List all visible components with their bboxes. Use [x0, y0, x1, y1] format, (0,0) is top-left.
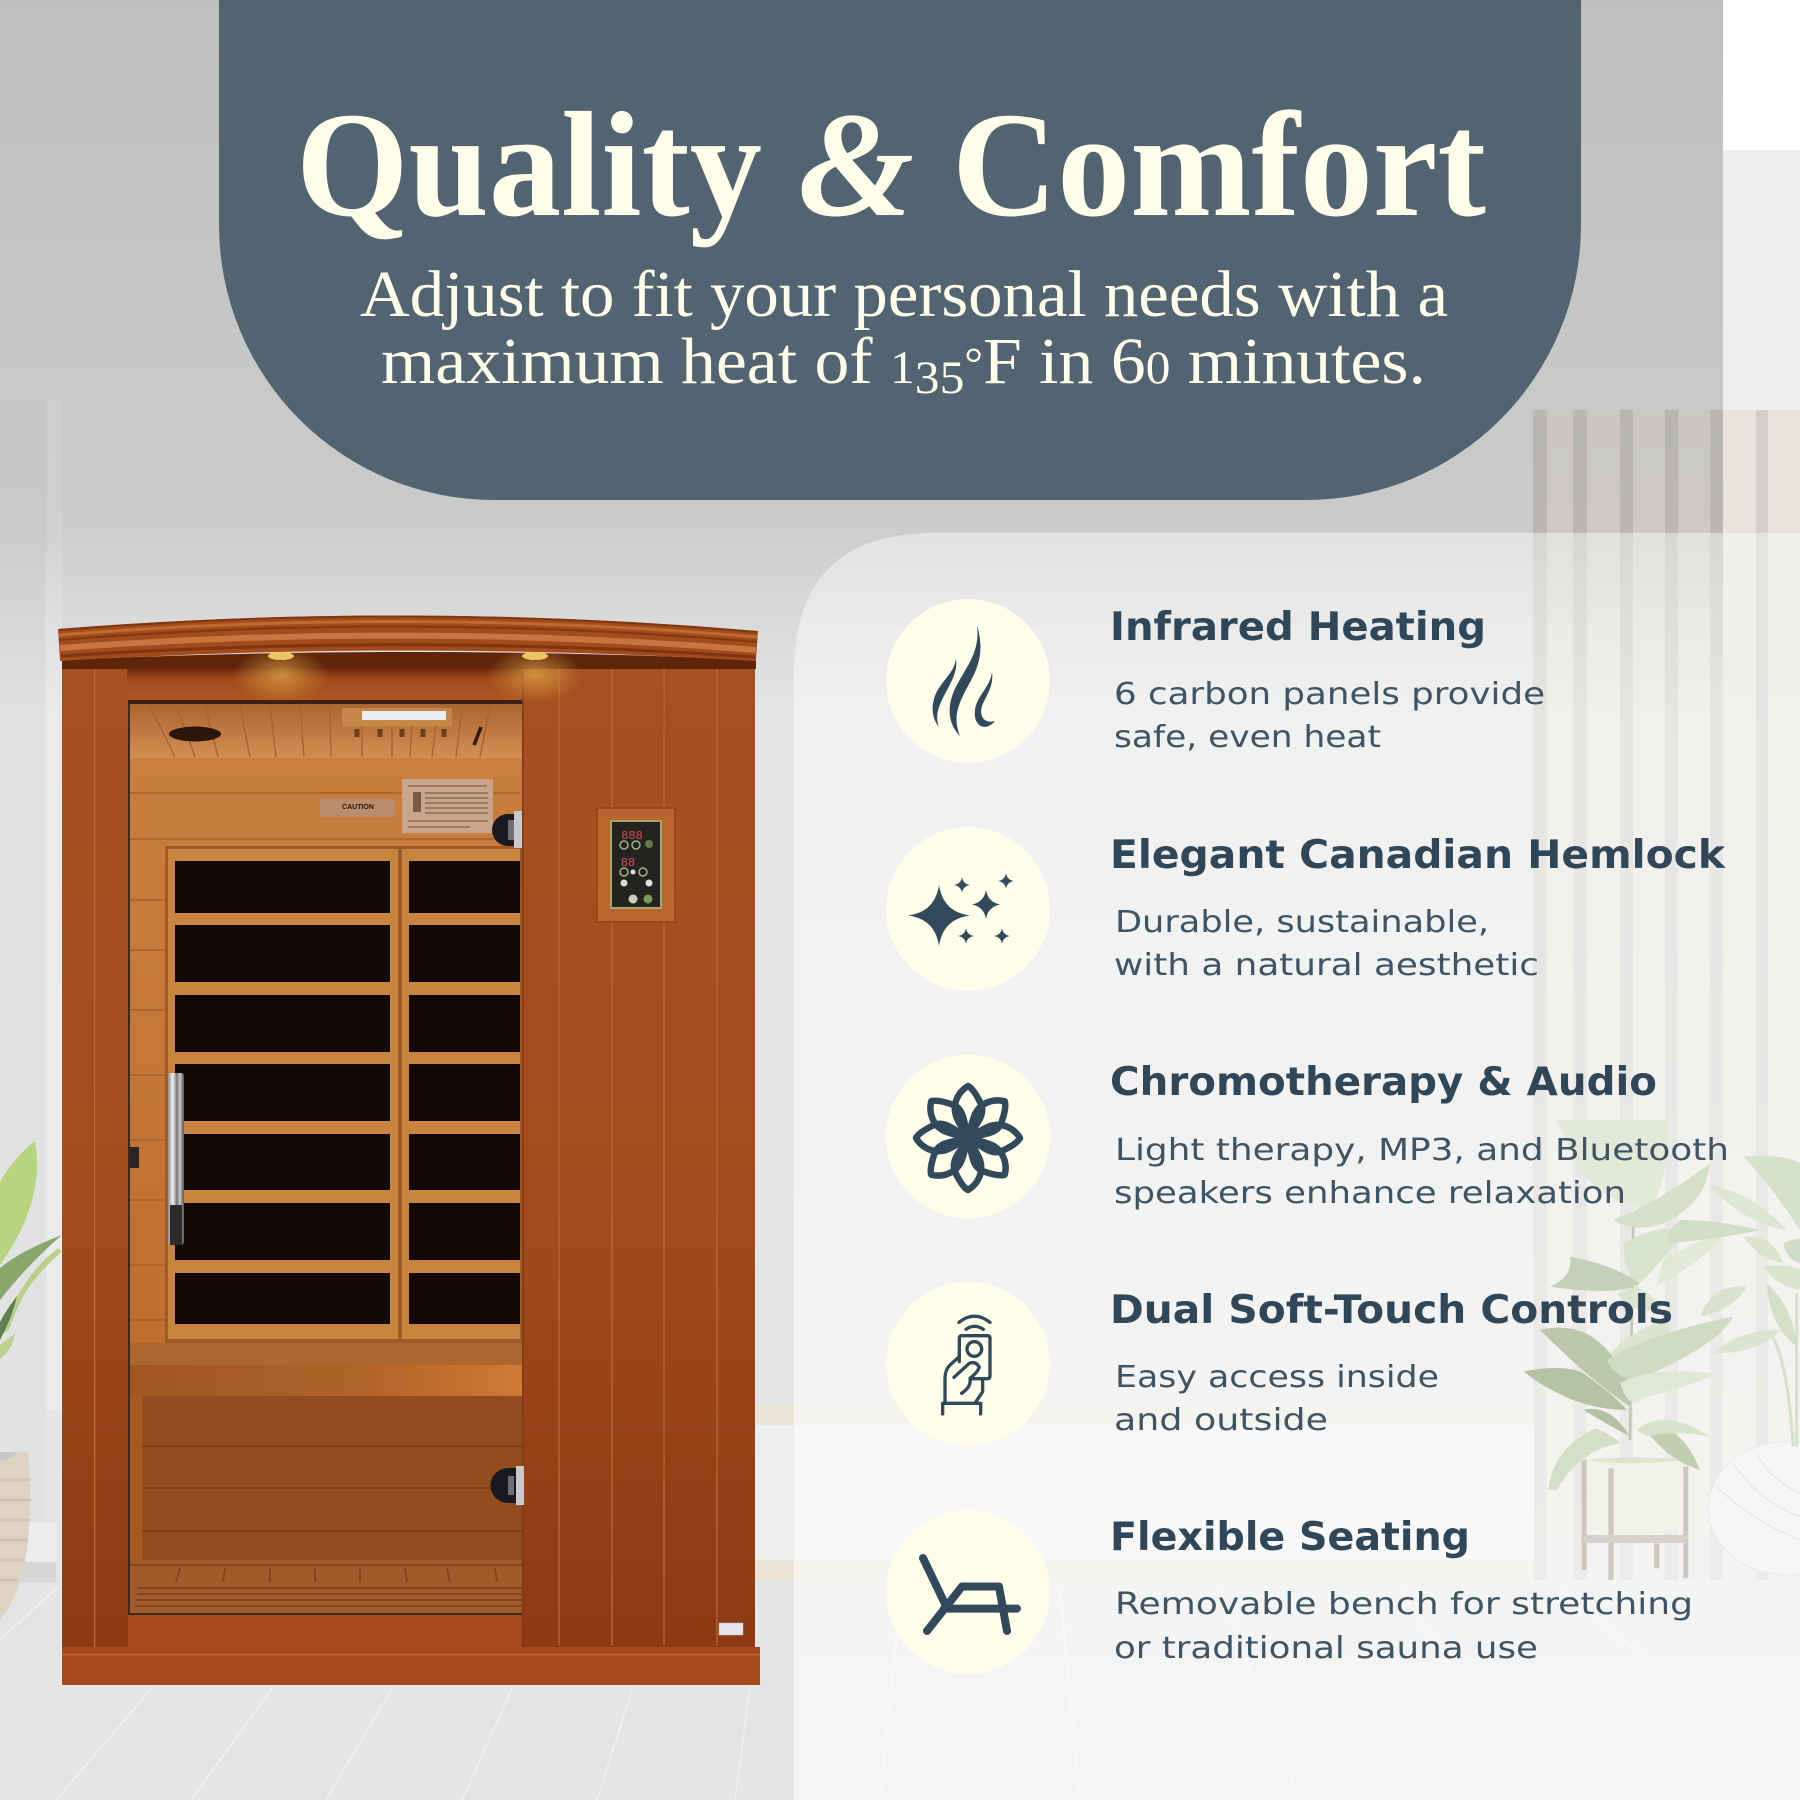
right cabin panel — [522, 668, 755, 1647]
white corner block — [1723, 0, 1800, 150]
description: Light therapy, MP3, and Bluetooth — [1115, 1133, 1729, 1168]
bench — [130, 1343, 522, 1561]
glass edge — [129, 704, 522, 1614]
feature: Dual Soft-Touch Controls — [886, 1282, 1673, 1446]
control panel — [597, 808, 675, 922]
feature: Infrared Heating — [886, 599, 1545, 763]
description: safe, even heat — [1114, 720, 1381, 755]
ceiling lights — [233, 647, 583, 703]
floor slats — [130, 1560, 522, 1614]
heading: Infrared Heating — [1110, 605, 1486, 650]
title: & — [798, 82, 914, 248]
heading: Dual Soft-Touch Controls — [1110, 1288, 1673, 1333]
subtitle: ° — [964, 339, 983, 388]
carbon heater panels — [165, 846, 522, 1343]
description: with a natural aesthetic — [1114, 948, 1539, 983]
description: speakers enhance relaxation — [1114, 1176, 1626, 1211]
feature: Flexible Seating — [886, 1510, 1693, 1674]
description: or traditional sauna use — [1114, 1631, 1538, 1666]
subtitle: F — [983, 325, 1022, 398]
description: Durable, sustainable, — [1115, 905, 1489, 940]
ceiling — [128, 700, 522, 758]
subtitle: 35 — [915, 352, 964, 404]
door hinges — [490, 811, 524, 1505]
fiddle leaves — [1523, 1120, 1760, 1490]
control panel: 88 — [621, 856, 635, 870]
feature: Chromotherapy & Audio — [886, 1054, 1729, 1218]
sauna cabin — [58, 615, 760, 1685]
description — [1114, 1587, 1693, 1666]
door bottom rail — [128, 1614, 526, 1648]
door header rail — [127, 666, 523, 700]
icon: sparkles — [886, 827, 1050, 991]
interior — [128, 700, 522, 1614]
panel: features backdrop — [794, 533, 1800, 1800]
title: Comfort — [952, 82, 1486, 248]
crown moulding — [58, 615, 758, 669]
description: Removable bench for stretching — [1115, 1587, 1693, 1622]
plinth — [62, 1647, 760, 1685]
top dark overlay — [0, 0, 1723, 720]
description — [1114, 905, 1539, 983]
subtitle: Adjust to fit your personal needs with a — [360, 258, 1448, 331]
back wall — [128, 700, 522, 1350]
description — [1114, 1360, 1439, 1438]
icon: heat waves — [886, 599, 1050, 763]
door handle — [168, 1073, 184, 1245]
certification label — [719, 1623, 743, 1635]
heading: Flexible Seating — [1110, 1515, 1470, 1560]
control panel: 888 — [621, 829, 643, 843]
title: Quality — [296, 82, 762, 248]
woven basket — [0, 1452, 31, 1620]
description: Easy access inside — [1115, 1360, 1439, 1395]
plant at left — [0, 1141, 62, 1359]
caution plates — [320, 779, 493, 833]
door latch — [128, 1147, 139, 1168]
caution plates: CAUTION — [342, 804, 374, 811]
title — [296, 82, 1486, 248]
description — [1114, 1133, 1729, 1211]
description: 6 carbon panels provide — [1114, 677, 1545, 712]
left post — [62, 669, 128, 1647]
background plant at right — [1523, 1120, 1800, 1580]
feature: Elegant Canadian Hemlock — [886, 827, 1726, 991]
description — [1114, 677, 1545, 755]
tall leaves — [1700, 1156, 1800, 1447]
subtitle: maximum heat of 1 — [381, 325, 913, 398]
header panel — [219, 0, 1581, 500]
icon: reclining chair — [886, 1510, 1050, 1674]
description: and outside — [1114, 1403, 1328, 1438]
heading: Elegant Canadian Hemlock — [1110, 833, 1726, 878]
icon: hand holding remote — [886, 1282, 1050, 1446]
subtitle: in 60 minutes. — [1038, 325, 1412, 398]
heading: Chromotherapy & Audio — [1110, 1060, 1657, 1105]
plant stand and pot — [1582, 1457, 1688, 1580]
subtitle — [360, 258, 1448, 404]
white vase — [1708, 1442, 1800, 1575]
icon: flower — [886, 1054, 1050, 1218]
